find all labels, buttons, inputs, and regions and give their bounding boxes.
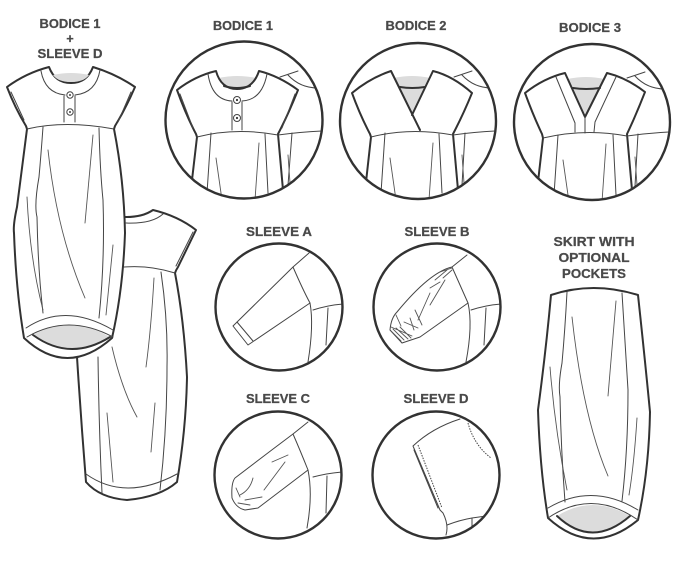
heading: bodice 1 + sleeve D [38,17,102,61]
heading: sleeve B: SLEEVE B [404,225,470,239]
heading: bodice 1 + sleeve D: SLEEVE D [38,47,102,61]
circle: sleeve A [216,244,343,370]
heading: sleeve D: SLEEVE D [404,392,468,406]
skirt illustration [538,288,650,539]
heading: bodice 1 + sleeve D: BODICE 1 [40,17,101,31]
heading: sleeve C: SLEEVE C [246,392,310,406]
heading: bodice 1: BODICE 1 [213,19,273,33]
heading: skirt with optional pockets [554,235,634,281]
front view dress [7,67,135,358]
circle: sleeve D [372,412,500,538]
heading: bodice 2: BODICE 2 [386,19,447,33]
heading: bodice 1 + sleeve D: + [66,32,74,46]
heading: skirt with optional pockets: OPTIONAL [558,251,630,265]
circle: bodice 1 detail [166,42,322,200]
back view dress [77,210,196,500]
heading: bodice 3: BODICE 3 [559,21,621,35]
circle: sleeve C [214,412,342,538]
buttons [67,92,73,115]
circle: bodice 2 detail [340,43,496,200]
circle: sleeve B [374,244,501,370]
heading: sleeve A: SLEEVE A [246,225,312,239]
heading: skirt with optional pockets: POCKETS [562,267,626,281]
heading: skirt with optional pockets: SKIRT WITH [554,235,634,249]
circle: bodice 3 detail [514,44,670,202]
